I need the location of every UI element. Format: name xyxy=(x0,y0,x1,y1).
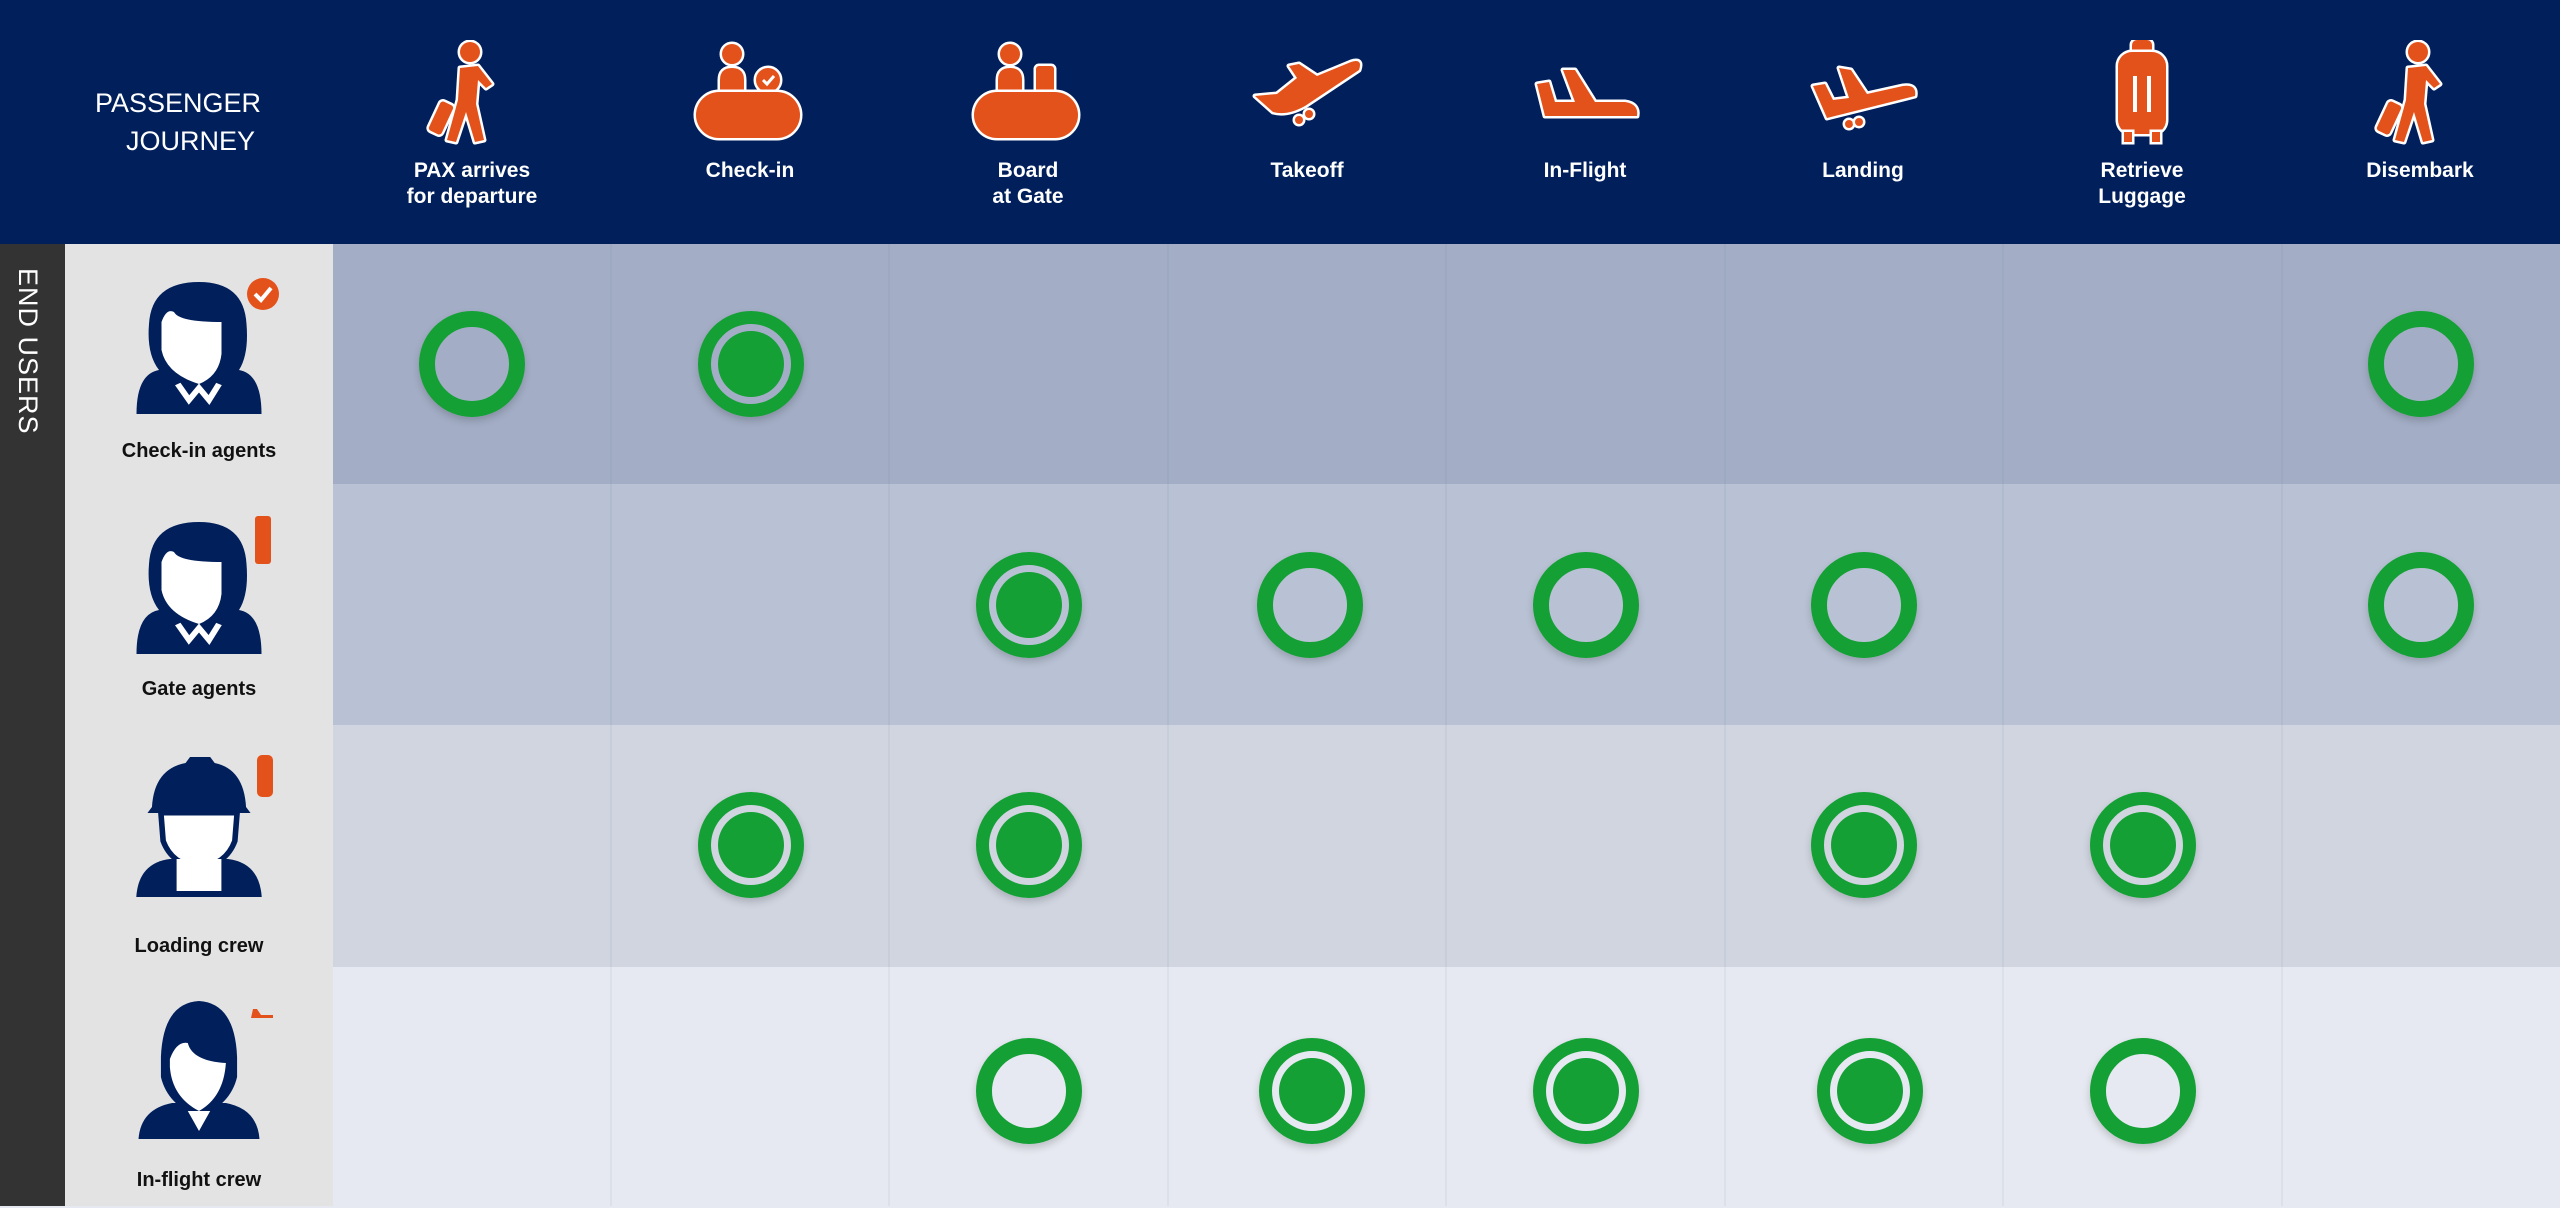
column: Board at Gate: Board xyxy=(998,159,1058,182)
user: Check-in agents: Check-in agents xyxy=(122,440,276,462)
column: Check-in xyxy=(694,42,802,182)
user: In-flight crew: In-flight crew xyxy=(137,1169,261,1191)
column: Takeoff xyxy=(1252,58,1362,182)
title: passenger journey xyxy=(95,88,261,156)
column: Board at Gate xyxy=(972,42,1080,208)
user: Check-in agents xyxy=(122,278,279,462)
column: In-Flight: In-Flight xyxy=(1544,159,1626,182)
column: Retrieve Luggage: Luggage xyxy=(2098,185,2186,208)
user: Gate agents xyxy=(136,516,271,700)
column: Board at Gate: at Gate xyxy=(992,185,1064,208)
column: PAX arrives xyxy=(406,40,537,208)
row 2 markers xyxy=(973,552,2477,665)
side bar: END USERS xyxy=(0,244,65,1206)
user column background xyxy=(65,244,333,1206)
column: Retrieve Luggage: Retrieve xyxy=(2101,159,2183,182)
column: In-Flight xyxy=(1534,68,1640,182)
user: Gate agents: Gate agents xyxy=(142,678,256,700)
column: Landing xyxy=(1810,66,1918,182)
side bar: END USERS: END USERS xyxy=(13,268,43,435)
column: Takeoff: Takeoff xyxy=(1270,159,1344,182)
column: Check-in: Check-in xyxy=(706,159,794,182)
row 1 markers xyxy=(416,311,2476,424)
column: Disembark xyxy=(2366,40,2474,182)
column: PAX arrives: for departure xyxy=(407,185,537,208)
row backgrounds xyxy=(333,244,2560,484)
title: passenger journey: JOURNEY xyxy=(126,126,255,156)
column: Retrieve Luggage xyxy=(2098,40,2186,208)
user: Loading crew: Loading crew xyxy=(135,935,263,957)
user: In-flight crew xyxy=(137,1001,273,1191)
user: Loading crew xyxy=(135,755,273,957)
column: Disembark: Disembark xyxy=(2366,159,2474,182)
column: Landing: Landing xyxy=(1822,159,1904,182)
title: passenger journey: PASSENGER xyxy=(95,88,261,118)
column: PAX arrives: PAX arrives xyxy=(414,159,530,182)
header band xyxy=(0,0,2560,244)
